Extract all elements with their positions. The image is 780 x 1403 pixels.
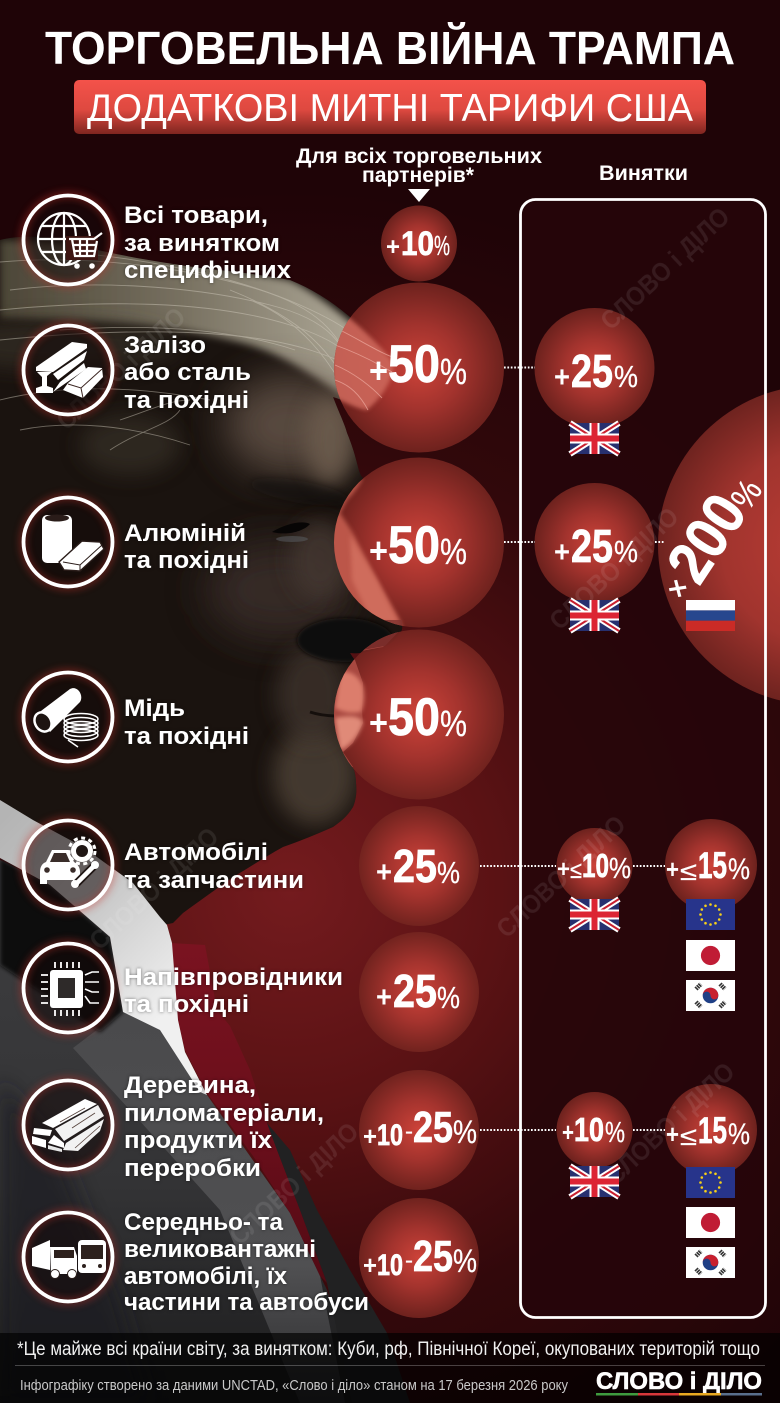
bubble: +50 iron [334,282,504,452]
value: up to 15% cars: ≤ [680,856,697,886]
value: UK up to 10% cars: + [557,856,570,883]
value: +50% iron: + [369,350,388,391]
value: x200% Russia: % [723,473,770,516]
value: +25% semiconductors: % [437,980,460,1015]
value: up to 15% cars [666,845,750,886]
portrait: suit and tie [0,858,410,1403]
value: +10-25% lumber: 25 [413,1103,453,1152]
value: UK +25% aluminium: % [614,534,638,569]
flag: South Korea lumber [686,1247,735,1278]
bubble: up to 15 cars [665,819,757,911]
label: aluminium [124,520,249,574]
bubble: up to 15 lumber [665,1084,757,1176]
flag: UK aluminium [570,600,619,631]
label: all goods: за винятком [124,230,280,257]
value: +10%: 10 [401,225,434,263]
value: up to 15% lumber: ≤ [680,1121,697,1151]
label: copper [124,695,249,750]
value: +10-25% lumber: + [363,1121,377,1151]
label: cars: Автомобілі [124,839,268,866]
nose showing through the +50 bubble [334,478,404,626]
value: +10-25% trucks: 10 [377,1249,403,1282]
value: up to 15% lumber: % [728,1118,750,1151]
row labels [124,202,369,1316]
label: copper: Мідь [124,695,185,722]
bubble: UK +25 iron [534,308,654,428]
label: iron [124,332,251,414]
arrow: down triangle [408,189,430,202]
icon: truck and bus [24,1212,112,1302]
bubble: +50 copper [334,630,504,800]
label: lumber [124,1072,324,1182]
value: +50% aluminium: % [440,531,467,572]
icon: car, gear and wrench [24,820,112,910]
portrait: head in profile [0,225,420,945]
label: trucks: великовантажні [124,1236,316,1263]
flag: EU lumber [686,1167,735,1198]
icon: steel beam and ingot [24,326,112,414]
value: +10%: % [434,230,450,261]
value: up to 15% cars: 15 [698,845,727,886]
watermarks [50,201,740,1251]
value: UK +25% iron: + [554,361,570,394]
exceptions box outline [520,200,766,1318]
flag: Japan lumber [686,1207,735,1238]
footer band [0,1333,780,1403]
value: +25% cars: % [437,855,460,890]
flag: South Korea cars [686,980,735,1011]
flag: UK iron [570,423,619,454]
watermarks: СЛОВО і ДІЛО [83,821,224,956]
value: x200% Russia: × [660,573,696,605]
value: +50% aluminium [369,516,467,575]
value: UK up to 10% cars: % [609,853,631,885]
column heading: exceptions: Винятки [599,162,688,185]
label: lumber: Деревина, [124,1072,256,1099]
value: +10-25% trucks: + [363,1250,377,1280]
label: trucks [124,1209,369,1316]
value: UK +25% iron [554,345,638,397]
column heading: all partners [296,145,542,187]
label: iron: та похідні [124,387,249,414]
watermarks: СЛОВО і ДІЛО [50,301,191,436]
value: +50% copper [369,688,467,747]
bubble: +10-25 lumber [359,1070,479,1190]
value: UK +25% aluminium [554,520,638,572]
label: trucks: Середньо- та [124,1209,283,1236]
value: +50% iron: 50 [388,335,440,394]
label: cars: та запчастини [124,867,304,894]
value: +10-25% lumber [363,1103,477,1152]
portrait: shirt collar [0,800,207,1095]
logo: СЛОВО і ДІЛО [596,1368,762,1395]
value: x200% Russia: 200 [654,482,759,594]
label: aluminium: та похідні [124,547,249,574]
value: +25% cars: 25 [393,840,437,892]
value: +25% semiconductors: 25 [393,965,437,1017]
value: +25% semiconductors: + [376,981,392,1014]
icon: globe and cart [24,196,112,284]
label: lumber: переробки [124,1155,261,1182]
flag: Russia [686,600,735,631]
bubble: +50 aluminium [334,458,504,628]
value: +10-25% lumber: 10 [377,1119,403,1152]
watermarks: СЛОВО і ДІЛО [599,1056,740,1191]
value: +10-25% lumber: % [453,1114,477,1150]
value: UK +10% lumber: 10 [574,1111,604,1148]
bubble: +10-25 trucks [359,1198,479,1318]
value: +50% iron [369,335,467,394]
label: trucks: автомобілі, їх [124,1263,287,1290]
label: cars [124,839,304,894]
value: +50% aluminium: + [369,530,388,571]
icon: pipe and coil [24,672,112,762]
value: +50% aluminium: 50 [388,516,440,575]
value: +25% semiconductors [376,965,460,1017]
value: UK +10% lumber [562,1111,625,1149]
icon: microchip [24,944,112,1032]
flag: EU cars [686,899,735,930]
value: up to 15% cars: + [666,854,679,884]
value: UK +25% aluminium: 25 [571,520,613,572]
label: semiconductors: Напівпровідники [124,964,343,991]
label: trucks: частини та автобуси [124,1289,369,1316]
label: all goods: специфічних [124,257,291,284]
value: UK +25% iron: % [614,359,638,394]
subtitle banner: ДОДАТКОВІ МИТНІ ТАРИФИ США [87,87,693,130]
watermarks: СЛОВО і ДІЛО [223,1116,364,1251]
label: copper: та похідні [124,723,249,750]
value: +10-25% trucks: - [405,1247,413,1274]
bubble: +25 semiconductors [359,932,479,1052]
icon: can and ingot [24,498,112,586]
bubble: Russia x200 [658,385,780,705]
value: UK +10% lumber: + [562,1117,574,1147]
label: aluminium: Алюміній [124,520,246,547]
value: +10%: + [386,233,400,261]
value: +50% copper: % [440,703,467,744]
value: up to 15% cars: % [728,853,750,886]
bubble: UK up to 10 cars [556,828,632,904]
value: +50% iron: % [440,351,467,392]
column heading: all partners: партнерів* [362,164,475,187]
value: UK +10% lumber: % [605,1117,625,1149]
icon ring backing and glow [23,195,113,1302]
value: +50% copper: 50 [388,688,440,747]
value: up to 15% lumber [666,1110,750,1151]
label: iron: Залізо [124,332,206,359]
value: +25% cars [376,840,460,892]
value: UK up to 10% cars: 10 [582,847,609,884]
label: semiconductors: та похідні [124,991,249,1018]
flag: UK lumber [570,1166,619,1197]
value: +10-25% lumber: - [405,1118,413,1145]
bubble: UK +25 aluminium [534,483,654,603]
value: +10-25% trucks: % [453,1243,477,1279]
source credit: Інфографіку створено за даними UNCTAD, «Слово і діло» станом на 17 березня 2026 року [20,1377,568,1394]
label: iron: або сталь [124,359,251,386]
label: all goods: Всі товари, [124,202,268,229]
flag: Japan cars [686,940,735,971]
bubble: +10 all goods [381,206,457,282]
value: UK +25% aluminium: + [554,536,570,569]
value: UK up to 10% cars: ≤ [570,857,582,884]
column heading: all partners: Для всіх торговельних [296,145,542,168]
watermarks: СЛОВО і ДІЛО [543,501,684,636]
bubble: UK 10 lumber [556,1092,632,1168]
watermarks: СЛОВО і ДІЛО [490,809,631,944]
lips showing through the +50 bubble [334,632,398,767]
value: UK up to 10% cars [557,847,631,885]
bubble: +25 cars [359,806,479,926]
value: up to 15% lumber: + [666,1119,679,1149]
value: x200% Russia [642,460,774,612]
value: +25% cars: + [376,856,392,889]
value: +10% [386,225,450,263]
value: +10-25% trucks: 25 [413,1232,453,1281]
panel: exceptions box interior [520,199,766,1318]
value: UK +25% iron: 25 [571,345,613,397]
flag: UK cars [570,899,619,930]
label: lumber: продукти їх [124,1127,272,1154]
icon: lumber stack [24,1080,112,1170]
hair tips showing through the +50 bubble [334,316,395,412]
watermarks: СЛОВО і ДІЛО [594,201,735,336]
label: semiconductors [124,964,343,1018]
label: lumber: пиломатеріали, [124,1100,324,1127]
title: ТОРГОВЕЛЬНА ВІЙНА ТРАМПА [45,22,735,74]
value: +10-25% trucks [363,1232,477,1282]
label: all goods [124,202,291,284]
value: +50% copper: + [369,702,388,743]
value: up to 15% lumber: 15 [698,1110,727,1151]
